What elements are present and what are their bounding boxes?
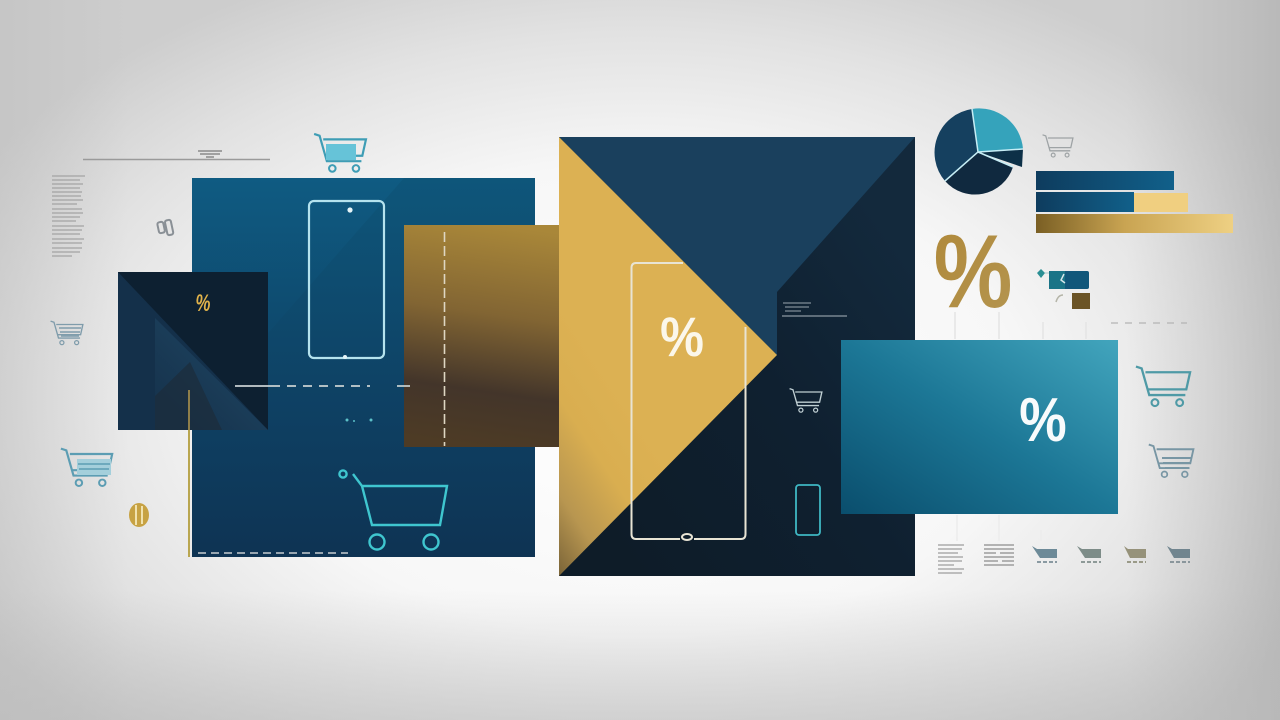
icon: cart right 1 <box>1136 367 1190 406</box>
panel: central geometric panel <box>559 137 915 576</box>
small icon cluster <box>1037 269 1090 309</box>
icon: grey cart top right <box>1043 135 1073 157</box>
panel: teal percent: % <box>1019 386 1067 455</box>
text block: thumbnail 1 <box>938 545 964 573</box>
top navy triangle <box>559 137 915 355</box>
icon: cart right 2 <box>1149 445 1193 477</box>
icon: cart left 1 <box>51 321 83 345</box>
bottom row of thumbnails <box>938 545 1190 573</box>
text block: thumbnail 2 <box>984 545 1014 565</box>
icon: mini cart 3 <box>1124 546 1146 562</box>
dashed footer line on blue panel <box>198 552 348 554</box>
icon: small cart on dark <box>790 389 822 412</box>
panel: blue phone panel <box>192 178 535 557</box>
icon: large phone outline <box>632 263 746 540</box>
icon: mini cart 4 <box>1167 546 1190 562</box>
darker diagonal facet <box>192 178 535 557</box>
large gold percent: % <box>934 214 1012 330</box>
panel: teal percent <box>841 340 1118 514</box>
pie chart <box>935 108 1023 195</box>
icon: gold coins <box>129 503 149 527</box>
icon: phone outline on blue panel <box>309 201 384 359</box>
small dashed label <box>1111 322 1187 324</box>
icon: small grey glyph <box>157 220 174 235</box>
icon: large cart on blue panel <box>339 470 447 550</box>
tick lines above thumbnails <box>957 515 1041 541</box>
header rule with label <box>83 151 270 160</box>
percent on gold: % <box>660 306 704 369</box>
icon: small teal phone <box>796 485 820 535</box>
panel: gold gradient <box>404 225 559 447</box>
icon: cart left 2 <box>61 449 112 486</box>
icon: gold glyph: % <box>196 290 210 317</box>
tick lines under percent <box>955 312 1086 339</box>
teal dots <box>346 418 372 422</box>
small label with rule <box>782 303 847 316</box>
text block: left column <box>52 176 85 256</box>
bar chart <box>1036 171 1233 233</box>
dashed connector <box>235 385 410 387</box>
gold vertical rule <box>188 390 190 557</box>
icon: mini cart 1 <box>1032 546 1057 562</box>
icon: top cart <box>314 134 366 172</box>
icon: mini cart 2 <box>1077 546 1101 562</box>
gold triangle <box>559 137 777 576</box>
panel: dark square <box>118 272 268 430</box>
